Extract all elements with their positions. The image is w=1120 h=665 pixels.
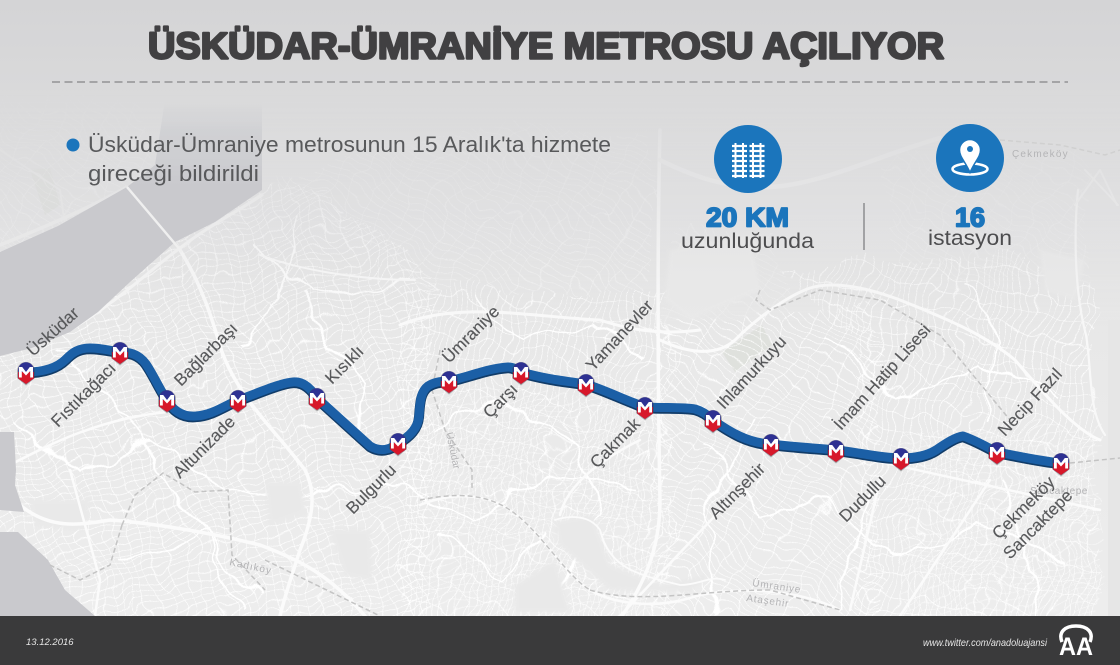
title: ÜSKÜDAR-ÜMRANİYE METROSU AÇILIYOR	[148, 26, 944, 66]
bullet text	[66, 132, 611, 186]
stat divider	[863, 203, 865, 250]
station labels: Çakmak	[586, 414, 644, 472]
right plain band	[1108, 320, 1120, 616]
map place labels: Üsküdar	[443, 431, 463, 471]
water: Bosphorus	[0, 100, 262, 356]
map place labels: Çekmeköy	[1012, 149, 1069, 160]
map place labels: Ümraniye	[752, 577, 802, 596]
station labels: Yamanevler	[582, 296, 657, 375]
station labels: Çekmeköy	[988, 472, 1059, 543]
station labels: Dudullu	[835, 472, 890, 526]
metro line	[26, 348, 1061, 464]
station labels: Ihlamurkuyu	[713, 332, 790, 413]
station markers	[17, 342, 1070, 476]
title divider	[52, 81, 1068, 83]
map place labels	[228, 149, 1088, 610]
station labels: Altunizade	[169, 412, 239, 482]
station labels: Kısıklı	[321, 342, 368, 388]
station labels: İmam Hatip Lisesi	[830, 321, 934, 434]
station labels: Ümraniye	[438, 302, 503, 367]
station labels: Üsküdar	[23, 303, 83, 360]
minor roads	[20, 220, 1060, 610]
fade overlay at top	[0, 0, 1120, 340]
green patches	[722, 325, 772, 372]
stat: 16 istasyon: 16	[955, 202, 985, 232]
icon: location pin	[936, 124, 1004, 192]
station labels: Altınşehir	[705, 459, 769, 523]
boundary dashes	[50, 140, 1120, 616]
station labels: Fıstıkağacı	[47, 359, 120, 431]
station labels: Sancaktepe	[999, 486, 1076, 563]
stat: 20 KM: 20 KM	[706, 202, 789, 232]
bullet text: gireceği bildirildi	[88, 161, 259, 186]
station labels: Necip Fazıl	[994, 365, 1066, 440]
station labels	[23, 296, 1076, 563]
station labels: Bağlarbaşı	[170, 319, 241, 390]
main roads	[0, 130, 1118, 616]
icon: railway tracks	[714, 125, 782, 193]
bullet text: Üsküdar-Ümraniye metrosunun 15 Aralık'ta hizmete	[88, 132, 611, 157]
footer date: 13.12.2016	[26, 637, 74, 648]
map place labels: Kadıköy	[228, 557, 273, 577]
stat: 20 KM	[681, 202, 814, 253]
stat: 16 istasyon: istasyon	[928, 227, 1012, 250]
empty grey patches	[30, 235, 1085, 612]
stat: 16 istasyon	[928, 202, 1012, 250]
footer bar	[0, 616, 1120, 665]
map place labels: Ataşehir	[746, 593, 790, 610]
logo: AA: AA	[1059, 633, 1093, 661]
stat: 20 KM: uzunluğunda	[681, 230, 814, 253]
map place labels: Sancaktepe	[1030, 486, 1088, 497]
footer url: www.twitter.com/anadoluajansi	[923, 637, 1048, 649]
station labels: Çarşı	[479, 380, 522, 422]
station labels: Bulgurlu	[342, 460, 400, 518]
bridge	[127, 187, 182, 252]
